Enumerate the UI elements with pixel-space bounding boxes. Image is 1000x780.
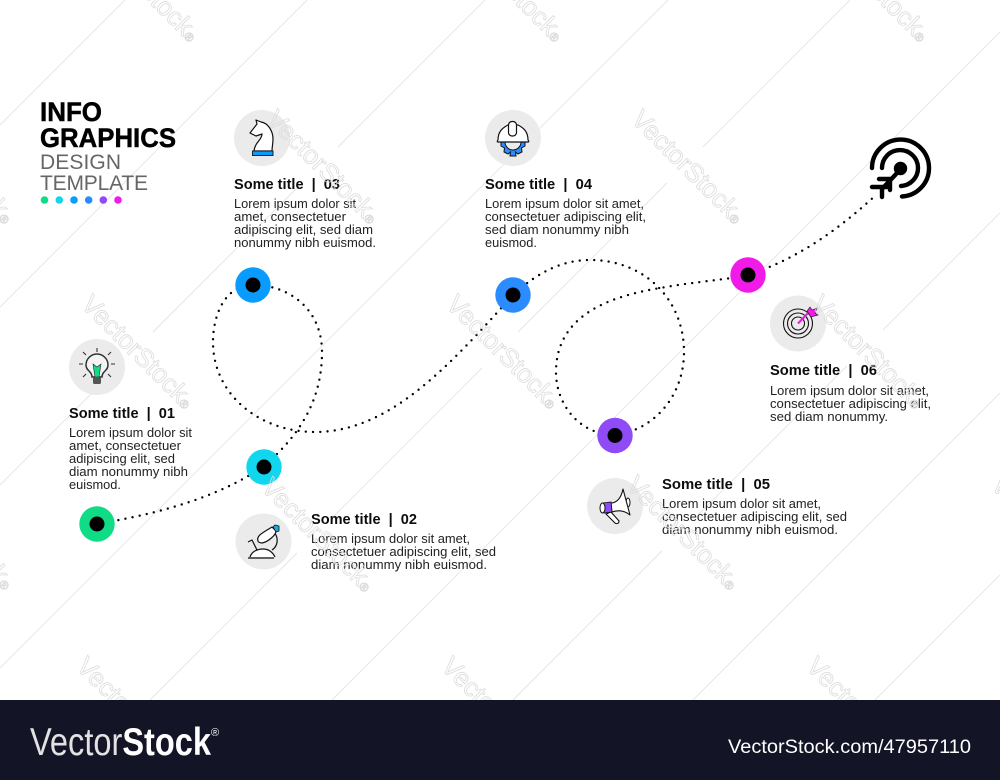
node 06 xyxy=(730,257,766,293)
footer logo: VectorStock xyxy=(30,721,211,764)
icon: goal target xyxy=(872,140,929,197)
title: GRAPHICS xyxy=(40,123,176,153)
watermark layer: VectorStock® xyxy=(621,470,746,595)
node 03 xyxy=(235,267,271,303)
panel: step 05: consectetuer adipiscing elit, sed xyxy=(662,510,847,524)
panel: step 01: euismod. xyxy=(69,478,121,492)
panel: step 03 xyxy=(234,110,376,250)
watermark layer: VectorStock® xyxy=(261,104,386,229)
panel: step 01: adipiscing elit, sed xyxy=(69,452,175,466)
panel: step 04: euismod. xyxy=(485,236,537,250)
panel: step 02 xyxy=(236,512,496,572)
watermark layer: VectorStock® xyxy=(436,651,561,776)
panel: step 05: diam nonummy nibh euismod. xyxy=(662,523,838,537)
panel: step 04: consectetuer adipiscing elit, xyxy=(485,210,646,224)
panel: step 06: sed diam nonummy. xyxy=(770,410,888,424)
icon: microscope xyxy=(236,514,292,570)
node 04 xyxy=(495,277,531,313)
title: INFO xyxy=(40,97,102,127)
panel: step 04: Lorem ipsum dolor sit amet, xyxy=(485,197,644,211)
node 01 xyxy=(79,506,115,542)
icon: dart target xyxy=(770,296,826,352)
panel: step 06: consectetuer adipiscing elit, xyxy=(770,397,931,411)
panel: step 03: nonummy nibh euismod. xyxy=(234,236,376,250)
panel: step 02: Some title | 02 xyxy=(311,512,417,528)
panel: step 03: Some title | 03 xyxy=(234,177,340,193)
watermark layer: VectorStock® xyxy=(806,289,931,414)
watermark layer: VectorStock® xyxy=(626,104,751,229)
icon: hard hat and gear xyxy=(485,110,541,166)
watermark layer: VectorStock® xyxy=(256,472,381,597)
panel: step 04: Some title | 04 xyxy=(485,177,592,193)
panel: step 02: diam nonummy nibh euismod. xyxy=(311,558,487,572)
title xyxy=(40,97,176,195)
panel: step 03: amet, consectetuer xyxy=(234,210,346,224)
node 05 xyxy=(597,418,633,453)
panel: step 04 xyxy=(485,110,646,250)
panel: step 03: adipiscing elit, sed diam xyxy=(234,223,373,237)
watermark layer: VectorStock® xyxy=(71,651,196,776)
panel: step 01 xyxy=(69,339,193,492)
panel: step 01: diam nonummy nibh xyxy=(69,465,188,479)
footer bar xyxy=(0,700,1000,780)
title: TEMPLATE xyxy=(40,172,148,195)
panel: step 06: Some title | 06 xyxy=(770,363,877,379)
panel: step 01: amet, consectetuer xyxy=(69,439,181,453)
icon: megaphone xyxy=(587,478,643,534)
panel: step 06 xyxy=(770,296,931,424)
title: DESIGN xyxy=(40,151,121,174)
panel: step 06: Lorem ipsum dolor sit amet, xyxy=(770,384,929,398)
panel: step 02: Lorem ipsum dolor sit amet, xyxy=(311,532,470,546)
node 02 xyxy=(246,449,282,485)
watermark layer: VectorStock® xyxy=(441,289,566,414)
panel: step 05 xyxy=(587,477,847,537)
panel: step 05: Lorem ipsum dolor sit amet, xyxy=(662,497,821,511)
watermark layer: VectorStock® xyxy=(801,651,926,776)
colour dots legend xyxy=(41,196,122,204)
panel: step 01: Lorem ipsum dolor sit xyxy=(69,426,193,440)
footer image id: VectorStock.com/47957110 xyxy=(728,737,971,758)
panel: step 01: Some title | 01 xyxy=(69,406,175,422)
panel: step 04: sed diam nonummy nibh xyxy=(485,223,629,237)
icon: chess knight xyxy=(234,110,290,166)
panel: step 05: Some title | 05 xyxy=(662,477,770,493)
icon: light bulb xyxy=(69,339,125,395)
panel: step 03: Lorem ipsum dolor sit xyxy=(234,197,357,211)
registered mark: ® xyxy=(211,727,219,739)
panel: step 02: consectetuer adipiscing elit, sed xyxy=(311,545,496,559)
dotted route xyxy=(97,195,876,524)
watermark layer: VectorStock® xyxy=(76,289,201,414)
